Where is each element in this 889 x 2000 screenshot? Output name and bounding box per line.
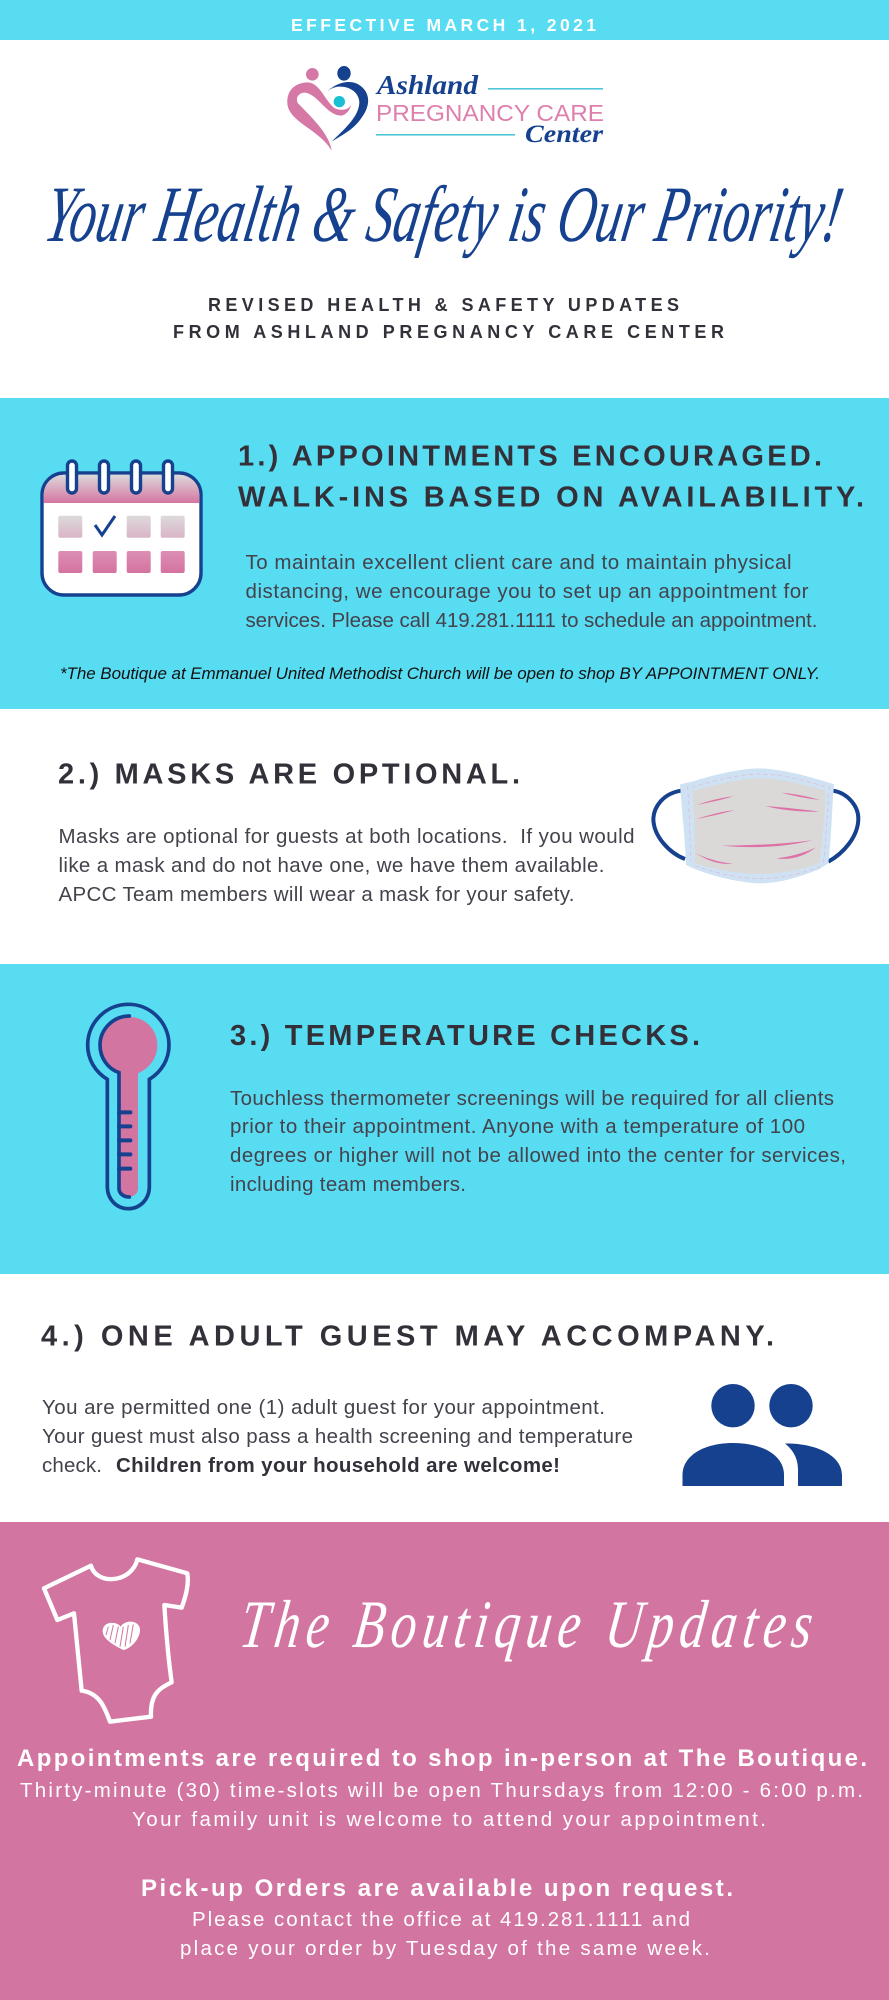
icon: baby onesie (44, 1559, 188, 1722)
top banner (0, 0, 889, 40)
panel: one adult guest (0, 1274, 889, 1522)
pick-up orders text: place your order by Tuesday of the same week. (180, 1937, 710, 1960)
boutique heading: The Boutique Updates (236, 1587, 817, 1663)
logo wordmark: PREGNANCY CARE (376, 100, 604, 126)
panel: appointments (0, 398, 889, 709)
logo heart mark (287, 66, 368, 151)
body text 3: degrees or higher will not be allowed into the center for services, (230, 1144, 846, 1167)
body text 1: services. Please call 419.281.1111 to schedule an appointment. (246, 609, 818, 632)
effective date: EFFECTIVE MARCH 1, 2021 (291, 15, 596, 35)
appointments text: Your family unit is welcome to attend your appointment. (132, 1808, 766, 1831)
body text 4: check. (42, 1454, 102, 1477)
heading 3: 3.) TEMPERATURE CHECKS. (230, 1020, 700, 1052)
body text 1 (246, 551, 818, 632)
heading 1: 1.) APPOINTMENTS ENCOURAGED. (238, 440, 822, 472)
icon: calendar (42, 461, 201, 595)
logo wordmark: Center (525, 121, 603, 148)
body text 2: Masks are optional for guests at both locations. If you would (58, 825, 634, 848)
panel: temperature checks (0, 964, 889, 1274)
body text 1: To maintain excellent client care and to maintain physical (246, 551, 792, 574)
logo wordmark (375, 70, 604, 148)
logo wordmark: Ashland (375, 70, 479, 100)
heading 1 (238, 440, 864, 514)
subtitle: FROM ASHLAND PREGNANCY CARE CENTER (173, 322, 724, 342)
heading 1: WALK-INS BASED ON AVAILABILITY. (238, 482, 864, 514)
icon: thermometer (88, 1004, 169, 1209)
body text 3: including team members. (230, 1173, 466, 1196)
body text 4: Your guest must also pass a health screening and temperature (42, 1425, 633, 1448)
heading 2: 2.) MASKS ARE OPTIONAL. (58, 758, 520, 790)
pick-up orders text: Pick-up Orders are available upon request. (141, 1875, 733, 1902)
heading 4: 4.) ONE ADULT GUEST MAY ACCOMPANY. (41, 1320, 774, 1352)
body text 3 (230, 1087, 846, 1196)
panel: the boutique updates (0, 1522, 889, 2000)
body text 4: Children from your household are welcome! (116, 1454, 560, 1477)
body text 2: like a mask and do not have one, we have them available. (58, 854, 604, 877)
body text 1: distancing, we encourage you to set up an appointment for (246, 580, 809, 603)
logo: Ashland Pregnancy Care Center (287, 66, 604, 151)
body text 4 (42, 1396, 633, 1477)
icon: two people (682, 1384, 842, 1486)
pick-up orders text: Please contact the office at 419.281.1111 and (192, 1908, 690, 1931)
appointments text: Appointments are required to shop in-person at The Boutique. (17, 1745, 867, 1772)
body text 2: APCC Team members will wear a mask for your safety. (58, 883, 574, 906)
body text 3: Touchless thermometer screenings will be required for all clients (230, 1087, 834, 1110)
appointments text: Thirty-minute (30) time-slots will be open Thursdays from 12:00 - 6:00 p.m. (20, 1779, 863, 1802)
body text 4: You are permitted one (1) adult guest for your appointment. (42, 1396, 605, 1419)
icon: face mask (653, 768, 858, 883)
appointments text (17, 1745, 867, 1831)
body text 3: prior to their appointment. Anyone with a temperature of 100 (230, 1115, 805, 1138)
footnote: *The Boutique at Emmanuel United Methodist Church will be open to shop BY APPOINTMENT ONLY. (60, 664, 820, 683)
body text 2 (58, 825, 634, 906)
subtitle (173, 295, 724, 342)
panel: masks (0, 709, 889, 964)
pick-up orders text (141, 1875, 733, 1960)
subtitle: REVISED HEALTH & SAFETY UPDATES (208, 295, 679, 315)
